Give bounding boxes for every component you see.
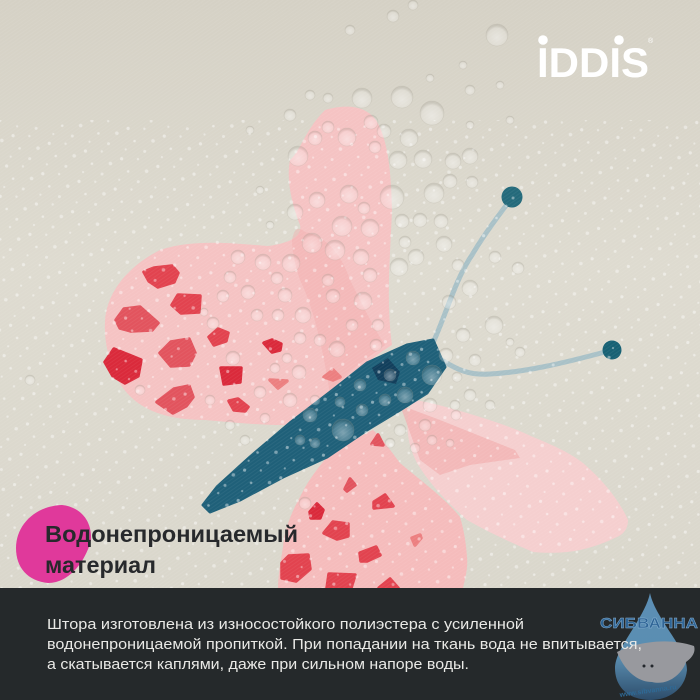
antennae bbox=[432, 203, 605, 374]
butterfly lower left wing bbox=[278, 430, 467, 588]
darker wash on upper wing bbox=[292, 229, 385, 395]
logo: iddis: ® bbox=[648, 37, 654, 45]
watermark drop bbox=[615, 593, 687, 700]
watermark face bbox=[642, 664, 654, 668]
wing spots bbox=[105, 266, 421, 588]
butterfly lower right wing bbox=[407, 400, 628, 553]
watermark url: www.sibvanna.ru bbox=[618, 684, 677, 699]
heading: Водонепроницаемый bbox=[45, 521, 298, 547]
body text: а скатывается каплями, даже при сильном напоре воды. bbox=[47, 656, 469, 673]
water droplets bbox=[25, 0, 525, 509]
butterfly upper wing bbox=[105, 107, 392, 425]
butterfly body bbox=[203, 340, 445, 512]
heading: материал bbox=[45, 552, 156, 578]
heading bbox=[45, 521, 298, 578]
antenna tip: right bbox=[602, 340, 622, 360]
butterfly illustration bbox=[105, 107, 628, 588]
body text: водонепроницаемой пропиткой. При попадании на ткань вода не впитывается, bbox=[47, 636, 642, 653]
fine water specks bbox=[0, 120, 700, 588]
watermark name: СИБВАННА bbox=[600, 615, 698, 632]
bottom dark panel bbox=[0, 588, 700, 700]
body text bbox=[47, 616, 642, 673]
body text: Штора изготовлена из износостойкого полиэстера с усиленной bbox=[47, 616, 524, 633]
pink accent circle bbox=[16, 505, 91, 583]
antenna tip: upper bbox=[502, 186, 522, 208]
watermark bathtub bbox=[617, 641, 695, 683]
darker wash on lower right wing bbox=[400, 405, 520, 475]
logo: iddis: IDDIS bbox=[537, 39, 649, 86]
dark patch on body bbox=[372, 358, 400, 384]
watermark: sibvanna logo bbox=[600, 593, 698, 700]
